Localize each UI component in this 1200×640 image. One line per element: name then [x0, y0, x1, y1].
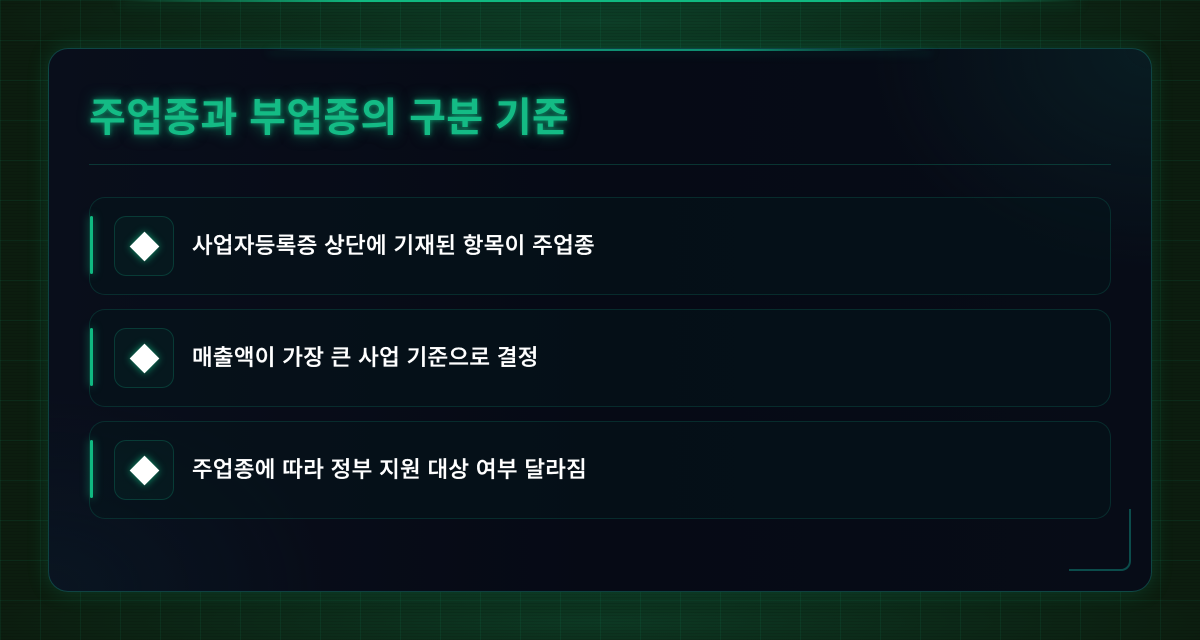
icon: diamond 1 — [114, 216, 174, 276]
list item 1 — [89, 197, 1111, 295]
card top glow line — [268, 49, 932, 51]
item 3 accent bar — [90, 440, 93, 498]
item 2 text: 매출액이 가장 큰 사업 기준으로 결정 — [192, 345, 539, 370]
list item 2 — [89, 309, 1111, 407]
title divider — [89, 164, 1111, 165]
corner bracket — [1069, 509, 1131, 571]
item 2 accent bar — [90, 328, 93, 386]
icon: diamond 2 — [114, 328, 174, 388]
item 1 text: 사업자등록증 상단에 기재된 항목이 주업종 — [192, 233, 595, 258]
icon: diamond 3 — [114, 440, 174, 500]
list item 3 — [89, 421, 1111, 519]
panel: main card — [48, 48, 1152, 592]
top accent line — [120, 0, 1080, 2]
title: 주업종과 부업종의 구분 기준 — [89, 96, 569, 140]
item 3 text: 주업종에 따라 정부 지원 대상 여부 달라짐 — [192, 457, 587, 482]
item 1 accent bar — [90, 216, 93, 274]
